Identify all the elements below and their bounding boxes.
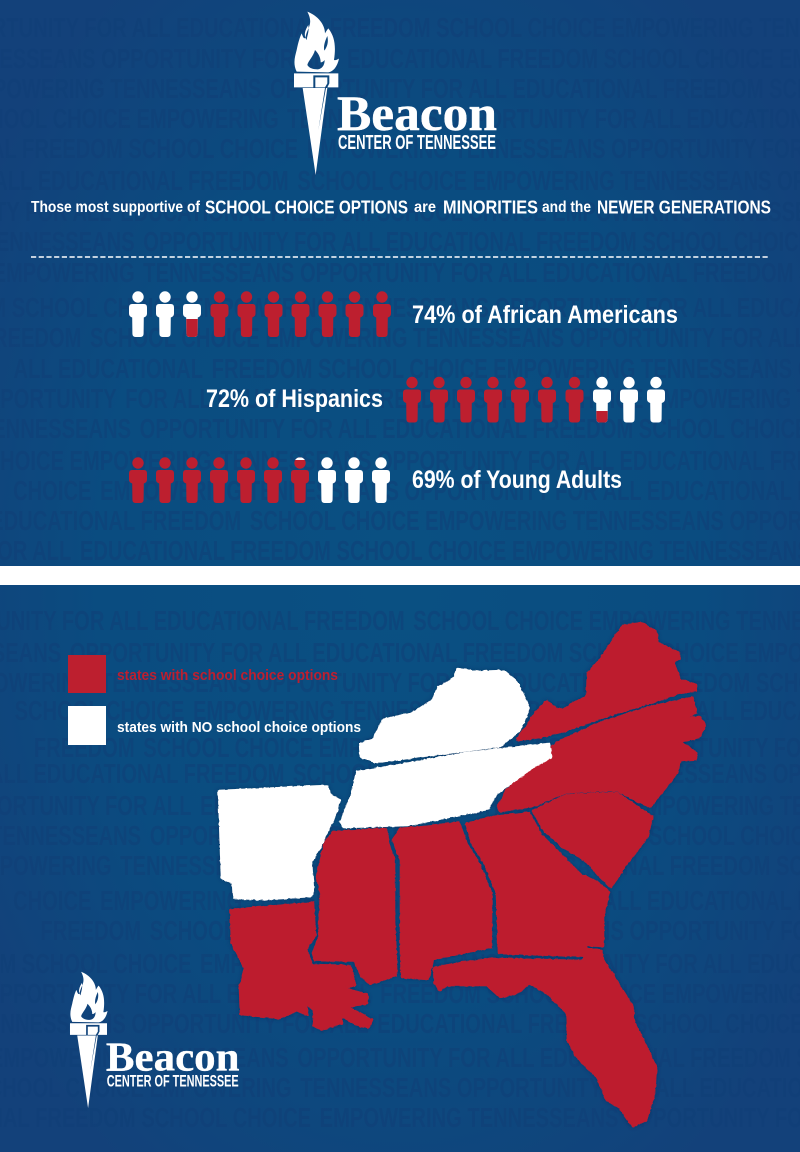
headline: MINORITIES <box>443 196 538 218</box>
background: faint repeated words: FREEDOM <box>40 916 141 947</box>
state: Arkansas <box>219 786 339 899</box>
state: Kentucky <box>360 669 529 762</box>
headline: and the <box>542 199 591 216</box>
state: Mississippi <box>313 829 396 984</box>
legend <box>68 655 361 745</box>
background: faint repeated words: FREEDOM <box>34 733 135 764</box>
logo: Beacon Center of Tennessee (bottom) <box>70 972 239 1108</box>
legend swatch: states with school choice <box>68 655 106 693</box>
map: southeastern states <box>219 623 705 1126</box>
state: Alabama <box>393 823 491 979</box>
background: faint repeated words: SCHOOL CHOICE <box>15 696 184 727</box>
stat label: Young Adults: 69% of Young Adults <box>412 466 622 494</box>
headline: Those most supportive of <box>31 199 201 216</box>
headline <box>31 196 771 218</box>
state: Georgia <box>466 813 609 956</box>
headline: NEWER GENERATIONS <box>597 196 771 218</box>
stat label: Hispanics: 72% of Hispanics <box>206 385 383 413</box>
pictogram: 74% of African Americans <box>129 291 391 337</box>
legend label: states with no school choice: states with NO school choice options <box>117 719 361 736</box>
state: Virginia <box>518 623 696 740</box>
headline: are <box>414 199 436 216</box>
pictogram: 72% of Hispanics <box>403 377 665 422</box>
legend label: states with school choice: states with school choice options <box>117 667 338 684</box>
state: Tennessee <box>341 744 551 827</box>
headline: SCHOOL CHOICE OPTIONS <box>205 196 408 218</box>
legend swatch: states with no school choice <box>68 706 106 745</box>
state: Louisiana <box>231 903 372 1029</box>
pictogram: 69% of Young Adults <box>129 457 390 503</box>
dashed divider <box>31 256 770 258</box>
background: faint repeated words: CHOICE <box>13 886 91 917</box>
stat label: African Americans: 74% of African Americans <box>412 301 678 329</box>
state: South Carolina <box>533 793 652 887</box>
background: faint repeated words: CHOICE <box>13 476 91 507</box>
state: Florida <box>434 949 656 1126</box>
background: faint repeated words: ALL EDUCATIONAL <box>14 354 203 385</box>
white band divider <box>0 566 800 585</box>
logo: Beacon Center of Tennessee (top) <box>294 12 497 175</box>
state: North Carolina <box>498 698 705 811</box>
